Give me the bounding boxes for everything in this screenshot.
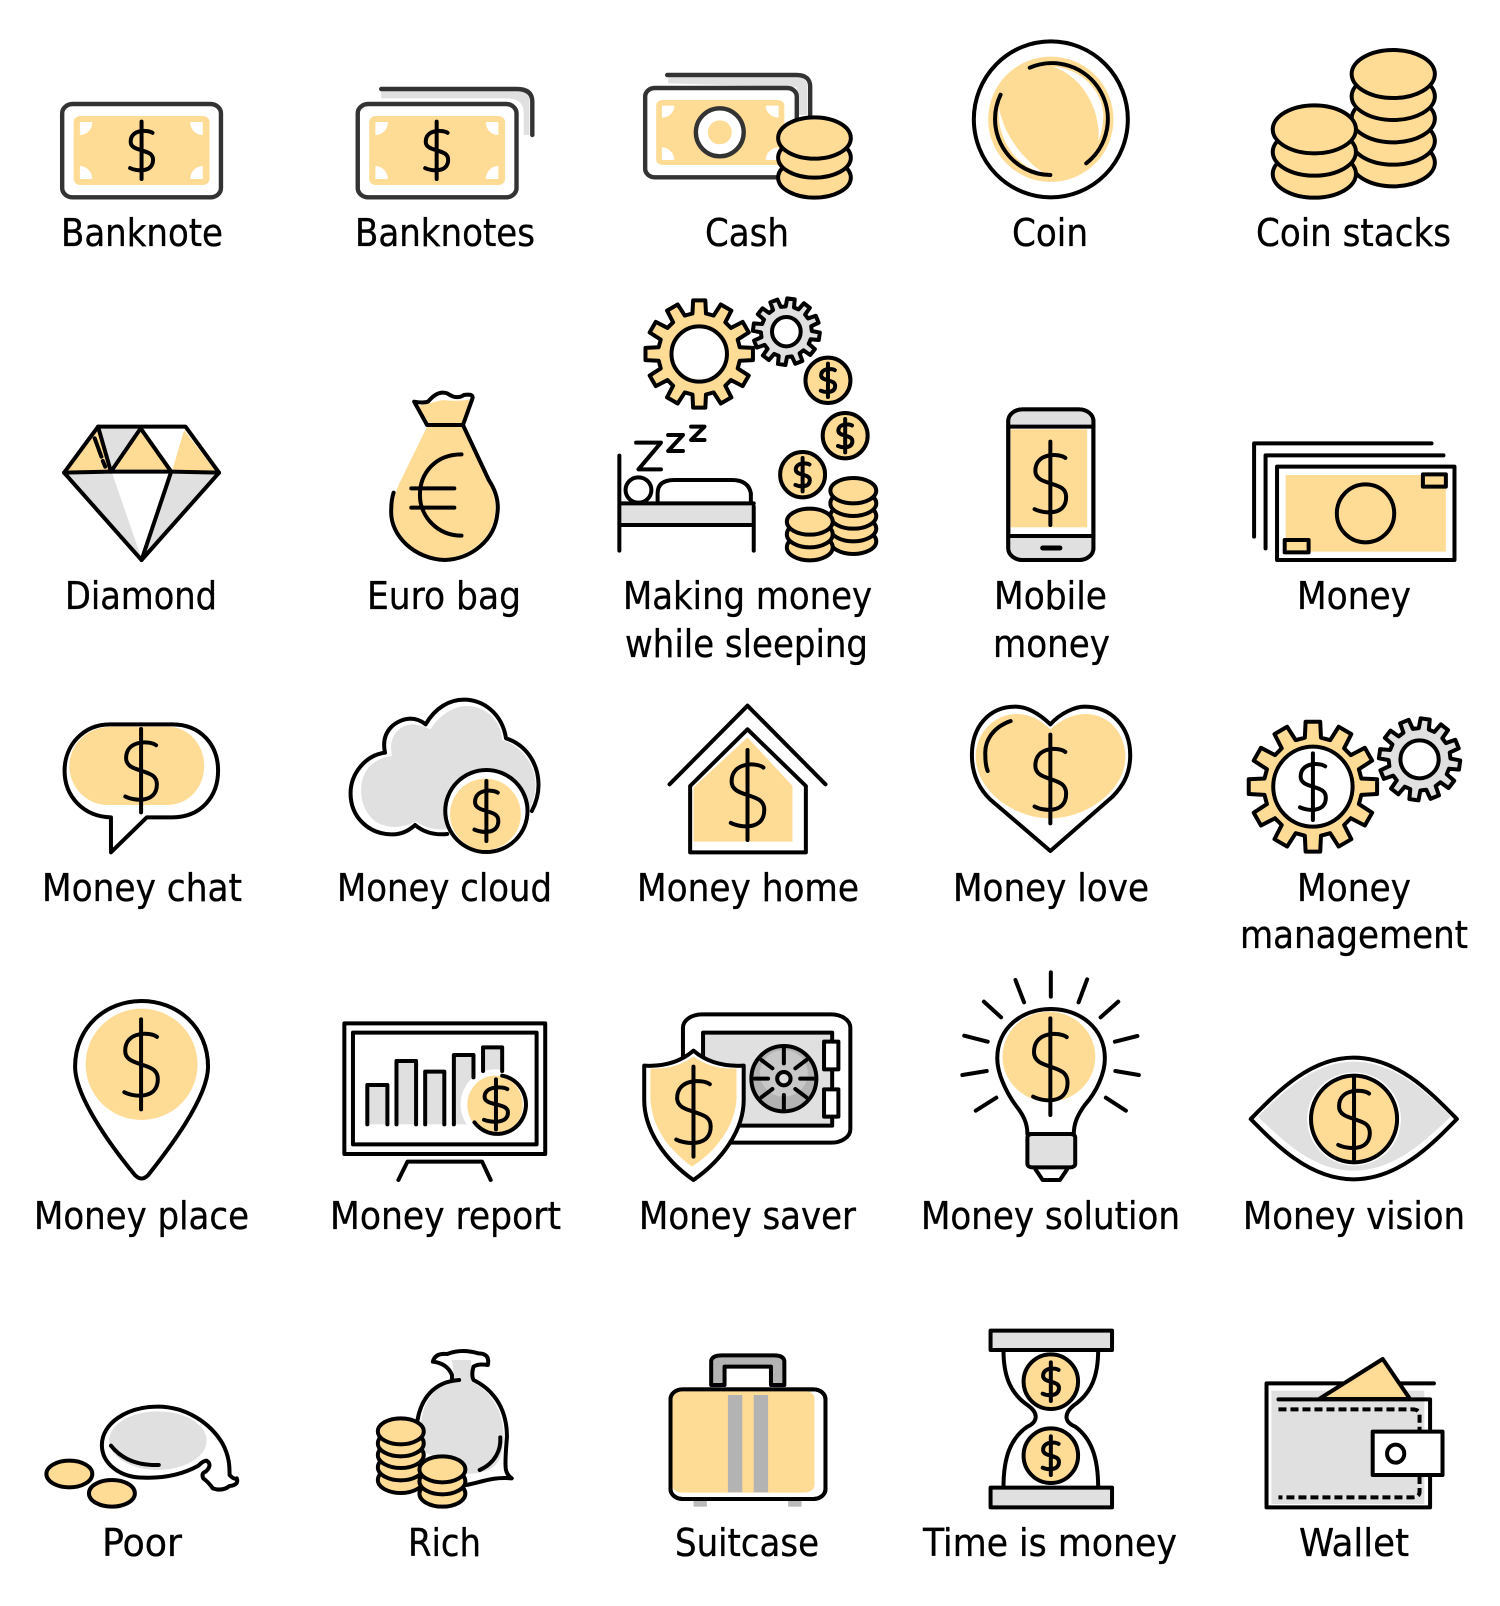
label: Money home: Money home xyxy=(637,866,859,910)
icon: money place xyxy=(75,1001,208,1178)
panel: Money place xyxy=(34,1001,249,1238)
panel: Money chat xyxy=(42,724,242,910)
panel: Money love xyxy=(953,707,1149,910)
panel: Euro bag xyxy=(367,393,521,618)
icon: cash xyxy=(645,75,851,198)
label: Coin stacks: Coin stacks xyxy=(1256,211,1451,255)
icon: money love xyxy=(972,707,1130,851)
small gear and coins xyxy=(749,294,876,560)
icon: banknotes xyxy=(358,89,532,197)
label: Mobile money xyxy=(993,574,1110,666)
label: Money: Money xyxy=(1297,574,1411,618)
icon: euro bag xyxy=(391,393,498,560)
panel: Money home xyxy=(637,706,859,910)
icon: coin xyxy=(974,41,1128,197)
icon: money management xyxy=(1249,713,1465,852)
label: Money management xyxy=(1240,866,1468,957)
icon: rich xyxy=(378,1351,512,1507)
label: Money report: Money report xyxy=(330,1194,561,1238)
panel: Money management xyxy=(1240,713,1468,957)
label: Money vision: Money vision xyxy=(1243,1194,1465,1238)
panel: Time is money xyxy=(922,1331,1177,1565)
panel: Suitcase xyxy=(671,1355,825,1565)
panel: Diamond xyxy=(64,427,219,618)
label: Money love: Money love xyxy=(953,866,1149,910)
panel: Rich xyxy=(378,1351,512,1565)
icon: money chat xyxy=(65,724,218,852)
label: Mobile money: money xyxy=(993,622,1110,666)
icon: diamond xyxy=(64,427,219,560)
bed, gear and sleeping figure xyxy=(619,300,754,551)
icon: money report xyxy=(344,1023,545,1180)
label: Money management: Money xyxy=(1297,866,1411,910)
label: Money management: management xyxy=(1240,913,1468,957)
panel: Money vision xyxy=(1243,1058,1465,1238)
label: Poor: Poor xyxy=(102,1521,183,1565)
label: Cash: Cash xyxy=(705,211,789,255)
panel: Coin xyxy=(974,41,1128,255)
icon: wallet xyxy=(1267,1359,1443,1507)
label: Making money while sleeping: Making money xyxy=(623,574,872,618)
icon: mobile money xyxy=(1008,409,1093,560)
label: Rich: Rich xyxy=(408,1521,481,1565)
icon: banknote xyxy=(62,104,221,197)
icon: money solution xyxy=(962,972,1139,1180)
icon: time is money xyxy=(991,1331,1112,1507)
label: Money chat: Money chat xyxy=(42,866,242,910)
icon: money cloud xyxy=(351,700,539,852)
panel: Money cloud xyxy=(337,700,552,910)
label: Banknote: Banknote xyxy=(61,211,223,255)
label: Coin: Coin xyxy=(1012,211,1088,255)
icon: suitcase xyxy=(671,1355,825,1507)
panel: Banknotes xyxy=(355,89,535,255)
label: Suitcase: Suitcase xyxy=(675,1521,819,1565)
panel: Money solution xyxy=(921,972,1180,1238)
label: Money place: Money place xyxy=(34,1194,249,1238)
panel: Coin stacks xyxy=(1256,50,1451,255)
panel: Mobile money xyxy=(993,409,1110,666)
label: Euro bag: Euro bag xyxy=(367,574,521,618)
label: Money solution: Money solution xyxy=(921,1194,1180,1238)
label: Making money while sleeping: while sleeping xyxy=(625,622,868,666)
panel: Poor xyxy=(46,1407,237,1565)
icon: money home xyxy=(670,706,825,852)
icon: money vision xyxy=(1251,1058,1457,1179)
panel: Wallet xyxy=(1267,1359,1443,1565)
label: Mobile money: Mobile xyxy=(994,574,1107,618)
label: Money saver: Money saver xyxy=(639,1194,857,1238)
label: Wallet: Wallet xyxy=(1299,1521,1409,1565)
label: Banknotes: Banknotes xyxy=(355,211,535,255)
panel: Cash xyxy=(645,75,851,255)
label: Diamond: Diamond xyxy=(65,574,217,618)
label: Money cloud: Money cloud xyxy=(337,866,552,910)
label: Making money while sleeping xyxy=(623,574,872,666)
panel: Making money while sleeping xyxy=(619,294,876,666)
panel: Banknote xyxy=(61,104,223,255)
panel: Money saver xyxy=(639,1014,857,1238)
label: Time is money: Time is money xyxy=(922,1521,1177,1565)
icon: money saver xyxy=(644,1014,850,1180)
panel: Money report xyxy=(330,1023,561,1238)
icon: making money while sleeping xyxy=(619,294,876,560)
panel: Money xyxy=(1254,443,1454,618)
icon: coin stacks xyxy=(1273,50,1435,198)
icon: poor xyxy=(46,1407,237,1507)
icon: money xyxy=(1254,443,1454,560)
